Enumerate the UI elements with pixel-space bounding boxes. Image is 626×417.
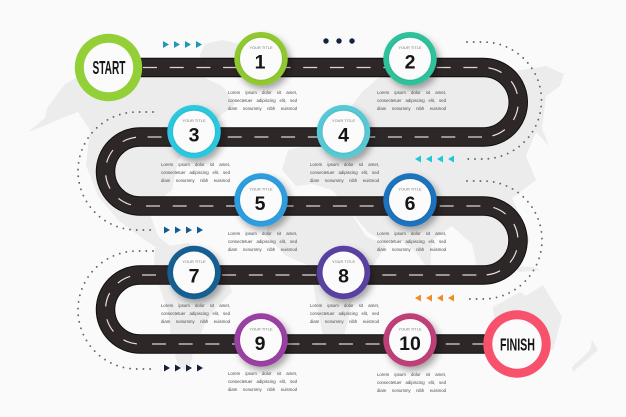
step 1 marker: 1 [255, 52, 266, 74]
step 7 marker: YOUR TITLE [182, 260, 206, 264]
step 6 text: Lorem ipsum dolor sit amet, [377, 231, 446, 236]
arrows: blue right [164, 226, 203, 234]
step 1 marker: YOUR TITLE [250, 46, 273, 50]
step 10 text: diam nonummy nibh euismod [377, 388, 446, 393]
step 6 marker [383, 173, 437, 227]
finish marker [483, 310, 551, 378]
step 8 text [310, 303, 379, 324]
step 8 marker: YOUR TITLE [332, 260, 355, 264]
step 4 marker [317, 105, 370, 158]
step 1 text: diam nonummy nibh euismod [228, 106, 297, 111]
step 10 text: consectetuer adipiscing elit, sed [377, 380, 446, 385]
three navy dots [323, 38, 355, 44]
step 2 text: Lorem ipsum dolor sit amet, [377, 90, 446, 95]
step 10 text [377, 372, 446, 393]
step 7 text: consectetuer adipiscing elit, sed [161, 311, 230, 316]
step 9 marker: 9 [255, 333, 266, 355]
step 2 text [377, 90, 446, 111]
step 9 text: consectetuer adipiscing elit, sed [228, 379, 297, 384]
arrows: cyan left [415, 156, 454, 162]
step 7 marker: 7 [189, 265, 199, 287]
step 9 text: diam nonummy nibh euismod [228, 387, 297, 392]
step 9 text: Lorem ipsum dolor sit amet, [228, 371, 297, 376]
step 6 text: consectetuer adipiscing elit, sed [377, 239, 446, 244]
step 9 text [228, 371, 297, 392]
step 10 marker [383, 313, 437, 367]
step 3 text: diam nonummy nibh euismod [161, 178, 230, 183]
step 8 text: consectetuer adipiscing elit, sed [310, 311, 379, 316]
step 2 text: consectetuer adipiscing elit, sed [377, 98, 446, 103]
step 8 marker: 8 [338, 265, 349, 287]
arrows: teal right [163, 41, 202, 48]
step 5 text [228, 231, 297, 252]
step 1 text [228, 90, 297, 111]
step 8 text: Lorem ipsum dolor sit amet, [310, 303, 379, 308]
step 9 marker [234, 313, 288, 367]
step 3 text: consectetuer adipiscing elit, sed [161, 170, 230, 175]
dotted guide arcs [78, 42, 542, 369]
step 4 text [310, 162, 379, 183]
arrows: orange left [415, 294, 454, 302]
step 4 text: Lorem ipsum dolor sit amet, [310, 162, 379, 167]
step 4 marker: 4 [338, 124, 349, 146]
step 5 marker: 5 [255, 193, 266, 215]
step 10 text: Lorem ipsum dolor sit amet, [377, 372, 446, 377]
step 3 marker: 3 [189, 124, 200, 146]
finish marker: FINISH [500, 334, 535, 354]
step 8 marker [317, 246, 370, 299]
step 8 text: diam nonummy nibh euismod [310, 319, 379, 324]
start marker [75, 34, 142, 101]
winding road [106, 68, 518, 344]
step 7 marker [167, 246, 221, 299]
world map background [28, 40, 598, 372]
step 5 text: consectetuer adipiscing elit, sed [228, 239, 297, 244]
step 5 text: Lorem ipsum dolor sit amet, [228, 231, 297, 236]
arrows: dark right [164, 364, 203, 372]
step 1 marker [234, 32, 288, 85]
step 6 marker: 6 [405, 193, 416, 215]
step 4 text: diam nonummy nibh euismod [310, 178, 379, 183]
step 9 marker: YOUR TITLE [250, 327, 273, 331]
step 6 text: diam nonummy nibh euismod [377, 247, 446, 252]
step 6 text [377, 231, 446, 252]
step 1 text: Lorem ipsum dolor sit amet, [228, 90, 297, 95]
start marker: START [92, 58, 126, 78]
step 5 marker [234, 173, 288, 227]
step 7 text: diam nonummy nibh euismod [161, 319, 230, 324]
step 3 marker: YOUR TITLE [182, 119, 206, 123]
step 10 marker: 10 [399, 333, 421, 355]
step 2 marker: YOUR TITLE [398, 46, 422, 50]
step 7 text [161, 303, 230, 324]
step 3 text: Lorem ipsum dolor sit amet, [161, 162, 230, 167]
step 5 marker: YOUR TITLE [250, 187, 273, 191]
step 5 text: diam nonummy nibh euismod [228, 247, 297, 252]
step 2 marker: 2 [405, 52, 416, 74]
step 10 marker: YOUR TITLE [398, 327, 422, 331]
step 2 text: diam nonummy nibh euismod [377, 106, 446, 111]
step 4 marker: YOUR TITLE [332, 119, 355, 123]
step 7 text: Lorem ipsum dolor sit amet, [161, 303, 230, 308]
step 6 marker: YOUR TITLE [398, 187, 422, 191]
step 3 marker [167, 105, 221, 158]
step 2 marker [383, 32, 437, 85]
step 4 text: consectetuer adipiscing elit, sed [310, 170, 379, 175]
step 3 text [161, 162, 230, 183]
step 1 text: consectetuer adipiscing elit, sed [228, 98, 297, 103]
